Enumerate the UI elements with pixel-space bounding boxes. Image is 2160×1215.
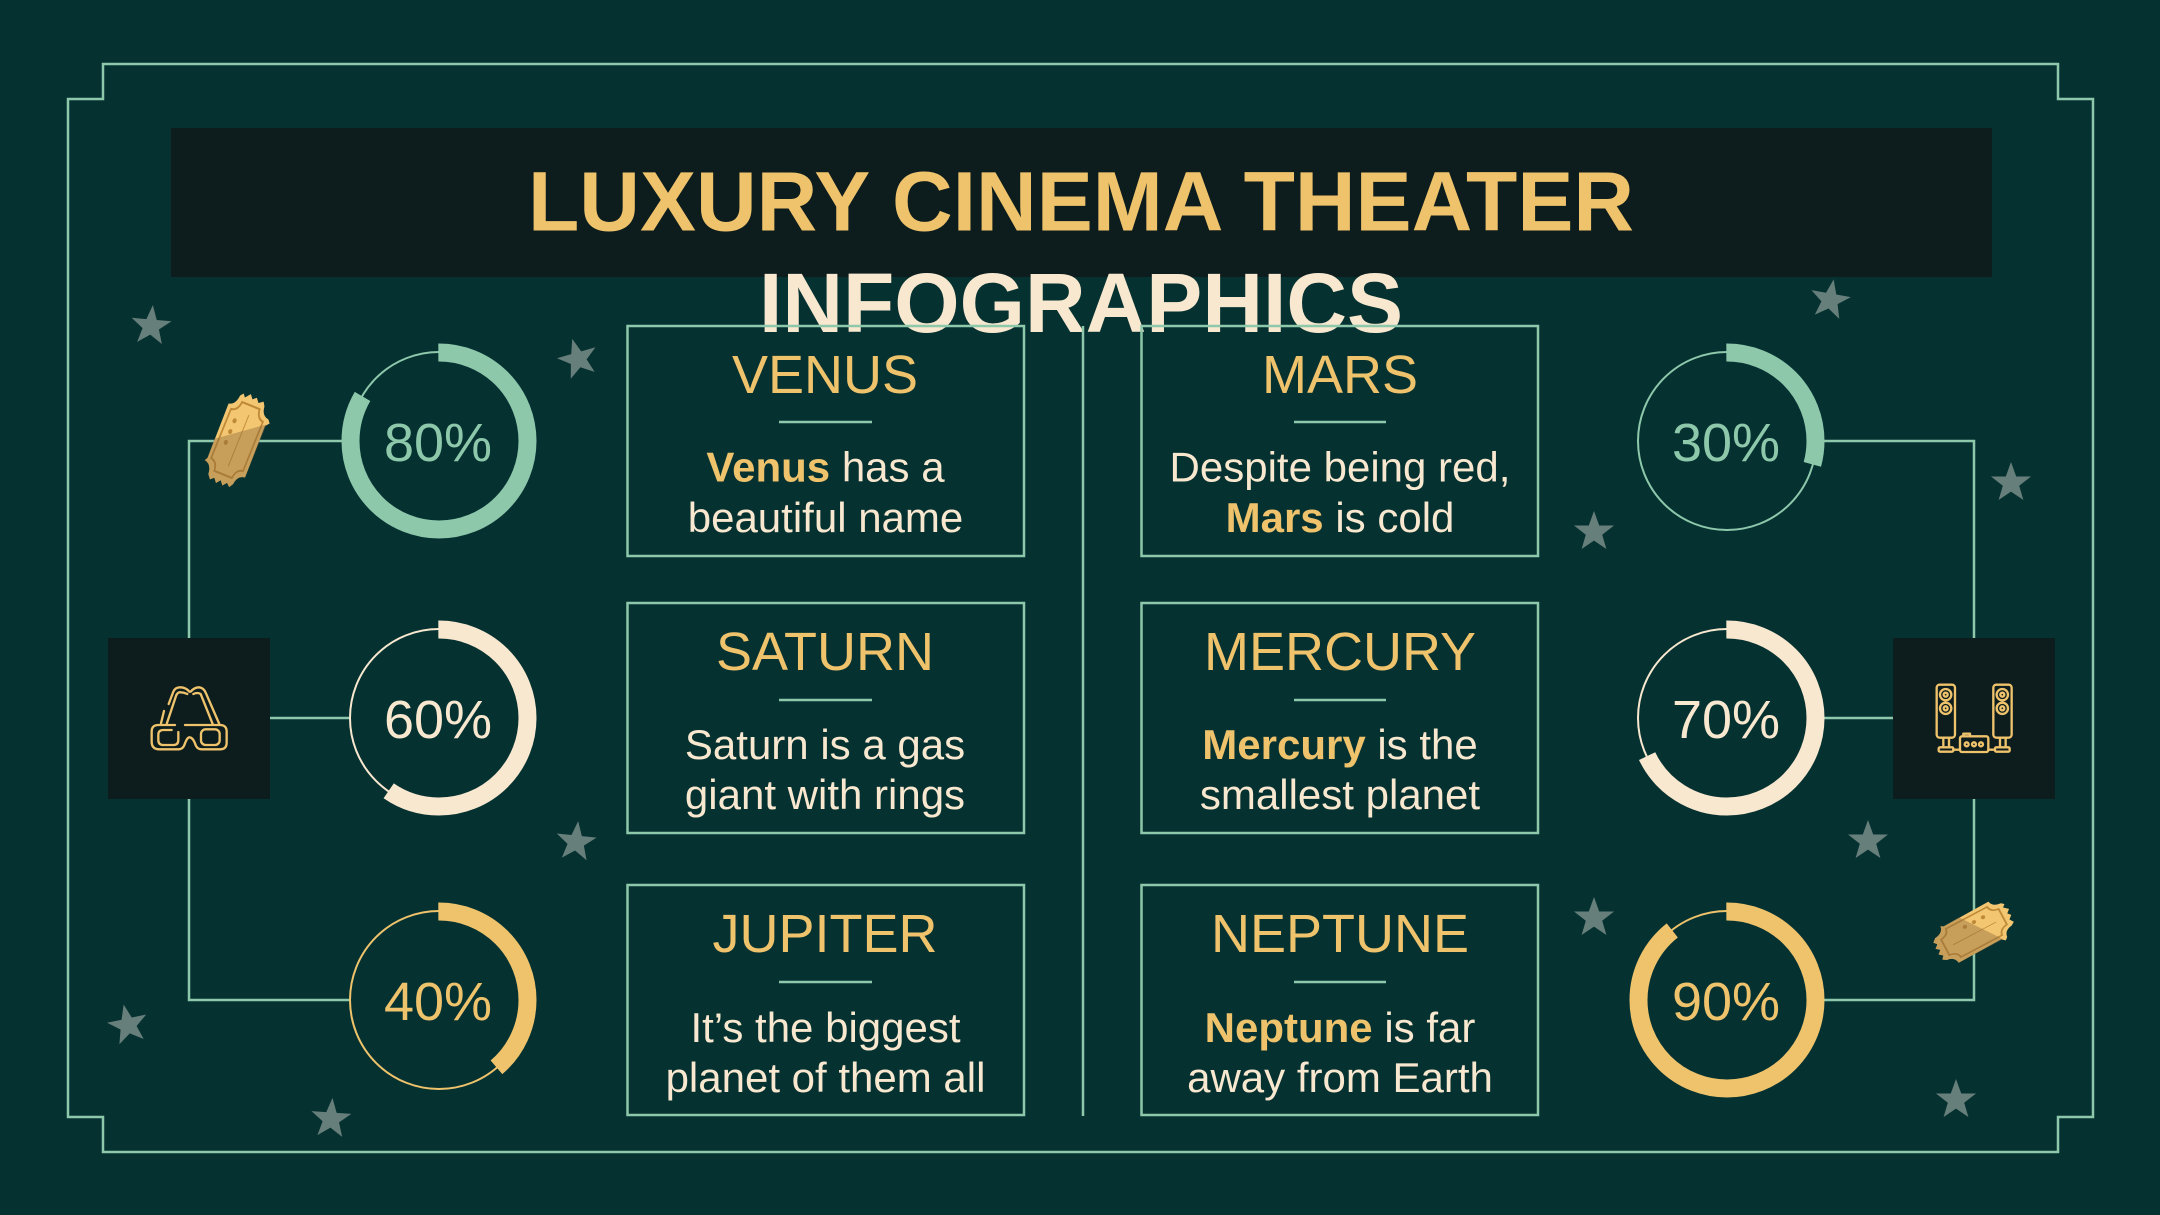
card: Jupiter <box>628 885 1024 1115</box>
donut 90% <box>1638 911 1816 1089</box>
card: Saturn: giant with rings <box>685 771 965 818</box>
card: Saturn <box>628 603 1024 833</box>
title <box>528 154 1634 350</box>
donut 70% <box>1638 629 1816 807</box>
stars <box>104 276 2031 1137</box>
title banner <box>171 128 1992 277</box>
card: Neptune: Neptune is far <box>1205 1004 1475 1051</box>
card: Neptune: NEPTUNE <box>1211 904 1469 964</box>
donut 30% <box>1638 352 1816 530</box>
card: Venus <box>628 326 1024 556</box>
card: Saturn: SATURN <box>716 622 934 682</box>
donut 60% <box>350 629 528 807</box>
icon: ticket right <box>1927 894 2021 971</box>
card: Mercury: smallest planet <box>1200 771 1480 818</box>
donut 80% <box>350 352 528 530</box>
card: Mars <box>1142 326 1538 556</box>
connectors: right <box>1727 441 1974 1000</box>
card: Saturn: Saturn is a gas <box>685 721 965 768</box>
donut 40%: 40% <box>384 972 492 1032</box>
card: Jupiter: It’s the biggest <box>690 1004 961 1051</box>
donut 80%: 80% <box>384 413 492 473</box>
card: Mercury: Mercury is the <box>1202 721 1478 768</box>
card: Mars: MARS <box>1262 345 1418 405</box>
card: Mars: Mars is cold <box>1226 494 1454 541</box>
card: Venus: Venus has a <box>706 444 945 490</box>
donut 90%: 90% <box>1672 972 1780 1032</box>
icon: ticket left <box>198 387 277 493</box>
icon box: 3D glasses <box>108 638 270 799</box>
donut 70%: 70% <box>1672 690 1780 750</box>
card: Venus: beautiful name <box>688 494 963 541</box>
donut 30%: 30% <box>1672 413 1780 473</box>
card: Neptune: away from Earth <box>1187 1054 1493 1101</box>
card: Jupiter: JUPITER <box>712 904 938 964</box>
icon box: speakers <box>1893 638 2055 799</box>
connectors: left <box>189 441 439 1000</box>
card: Venus: VENUS <box>732 345 918 405</box>
card: Mars: Despite being red, <box>1170 444 1510 490</box>
donut 40% <box>350 911 528 1089</box>
donut 60%: 60% <box>384 690 492 750</box>
center divider <box>1082 326 1084 1116</box>
card: Jupiter: planet of them all <box>666 1054 985 1101</box>
title: INFOGRAPHICS <box>759 256 1403 350</box>
card: Mercury: MERCURY <box>1204 622 1476 682</box>
card: Mercury <box>1142 603 1538 833</box>
card: Neptune <box>1142 885 1538 1115</box>
title: LUXURY CINEMA THEATER <box>528 154 1634 248</box>
